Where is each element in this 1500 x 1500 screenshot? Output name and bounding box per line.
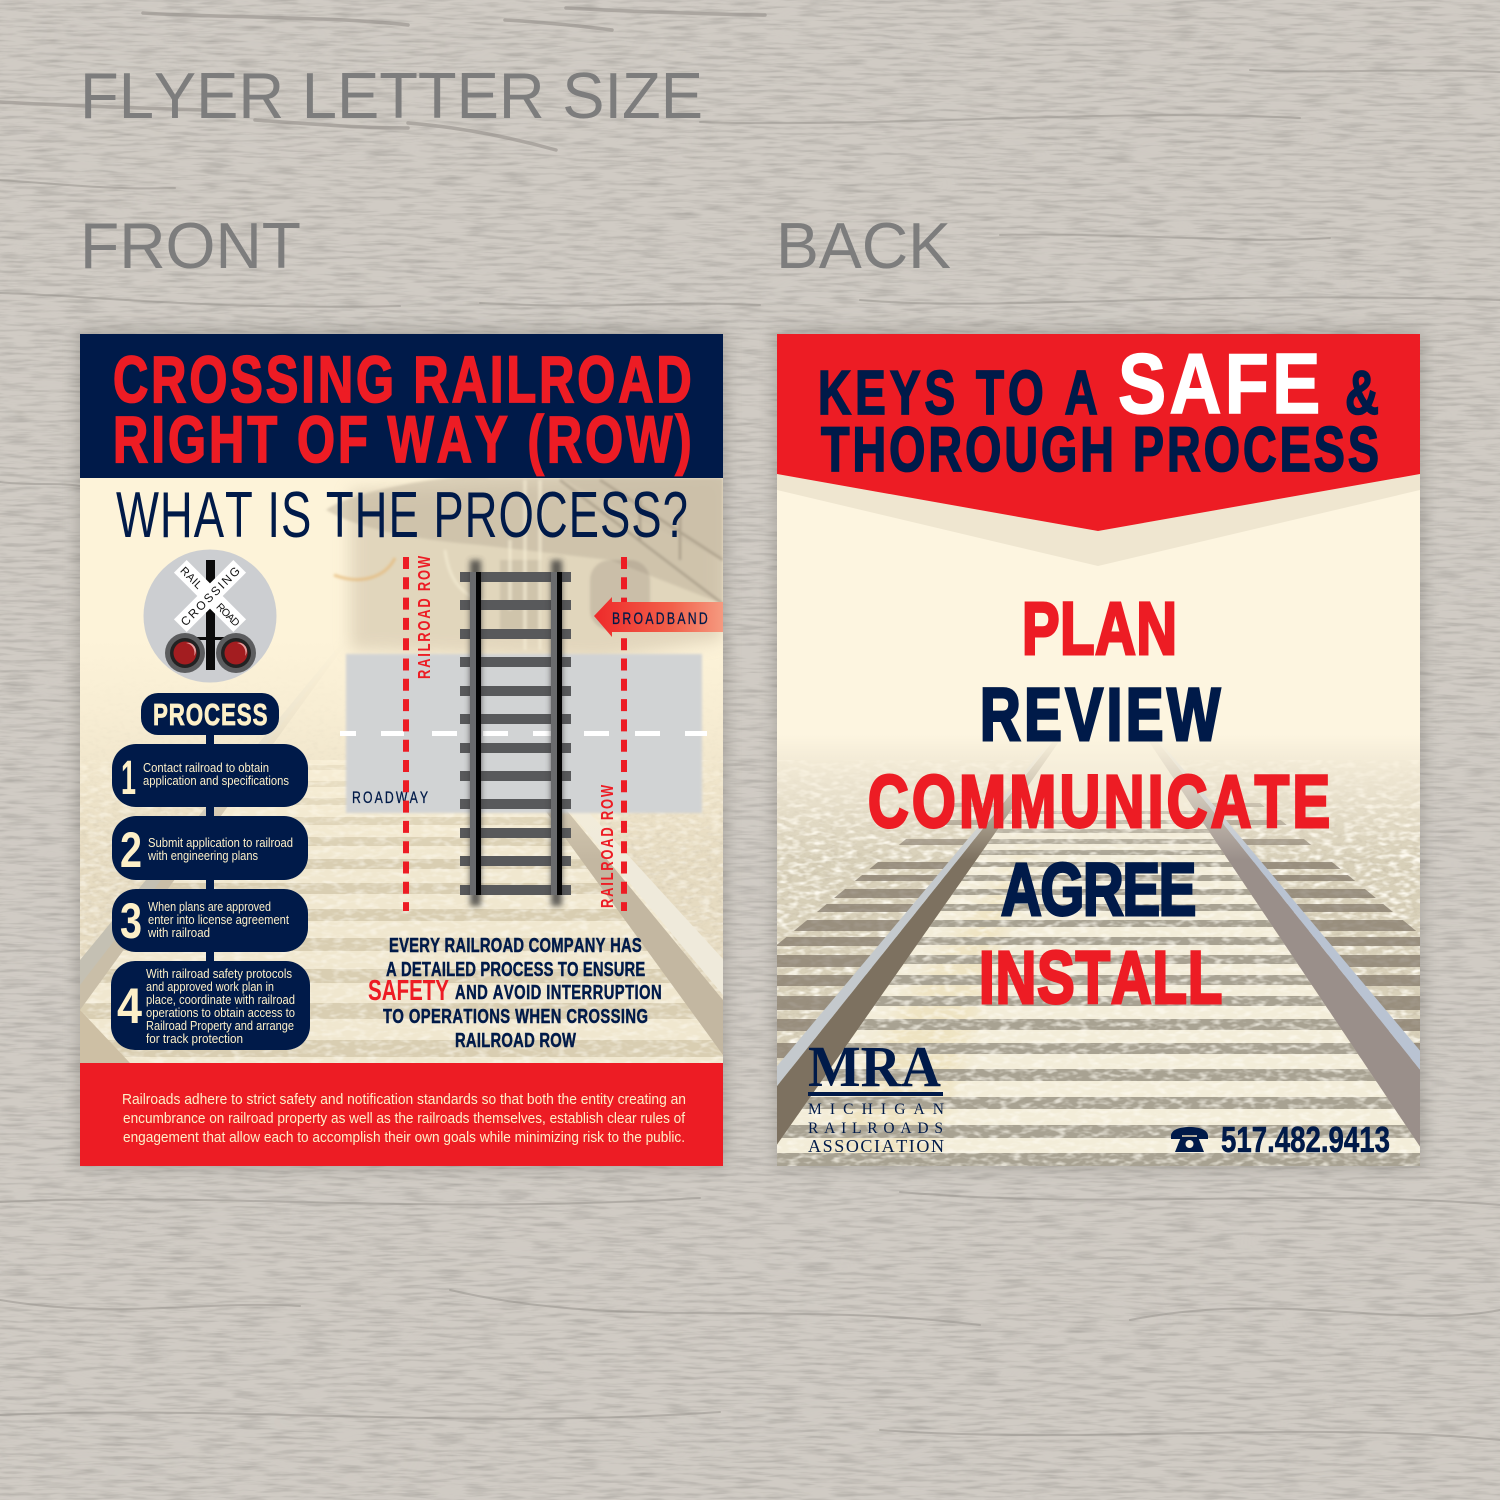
panel: front flyer	[80, 334, 723, 1166]
title banner: THOROUGH PROCESS	[821, 414, 1379, 485]
arrow: broadband: BROADBAND	[612, 610, 708, 629]
lower-left rail	[80, 724, 287, 1010]
icon: railroad crossing sign: CROSSING	[178, 564, 243, 629]
icon: railroad crossing sign: RAIL	[177, 565, 204, 592]
title banner: KEYS TO A	[818, 358, 1098, 428]
step 3: 3	[120, 893, 142, 949]
key words list: PLAN	[1022, 588, 1177, 670]
process label: PROCESS	[153, 697, 267, 732]
footer band: Railroads adhere to strict safety and notification standards so that both the entity creating an	[122, 1091, 686, 1108]
process connector line	[206, 730, 214, 965]
subtitle: WHAT IS THE PROCESS?	[116, 478, 688, 551]
key words list: COMMUNICATE	[868, 761, 1330, 843]
step 4: and approved work plan in	[146, 980, 274, 994]
step 4: operations to obtain access to	[146, 1006, 295, 1020]
diagram: railroad track	[460, 560, 571, 906]
step 2: 2	[120, 822, 142, 878]
title band: CROSSING RAILROAD	[113, 343, 692, 417]
icon: telephone	[1171, 1127, 1208, 1152]
panel: back flyer	[777, 334, 1420, 1166]
contact: phone	[1171, 1119, 1390, 1160]
step 4: 4	[117, 978, 142, 1034]
step 2: Submit application to railroad	[148, 836, 293, 850]
text block: safety note: EVERY RAILROAD COMPANY HAS	[389, 934, 642, 957]
step 2	[112, 816, 308, 880]
track bed	[777, 771, 1420, 1153]
ties outside rails	[777, 803, 1420, 1166]
background photo: tracks	[777, 474, 1420, 1166]
step 1	[112, 744, 308, 807]
step 4	[111, 961, 310, 1050]
logo: Michigan Railroads Association	[808, 1034, 944, 1156]
title banner: &	[1345, 358, 1379, 428]
logo: Michigan Railroads Association: ASSOCIATION	[808, 1136, 944, 1156]
text block: safety note: TO OPERATIONS WHEN CROSSING	[383, 1005, 648, 1028]
logo: Michigan Railroads Association: MICHIGAN	[808, 1101, 944, 1118]
step 1: application and specifications	[143, 774, 289, 788]
heading: front: FRONT	[80, 209, 301, 282]
text block: safety note	[368, 934, 662, 1052]
logo: Michigan Railroads Association: MRA	[808, 1034, 941, 1099]
title band	[80, 334, 723, 478]
key words list: AGREE	[1001, 849, 1196, 931]
title band: RIGHT OF WAY (ROW)	[113, 403, 692, 477]
footer band: engagement that allow each to accomplish their own goals while minimizing risk to the public.	[123, 1129, 685, 1146]
chevron shadow band	[777, 474, 1420, 566]
footer band: encumbrance on railroad property as well as the railroads themselves, establish clear rules of	[123, 1110, 686, 1127]
lower-right rail	[546, 812, 723, 1055]
step 4: With railroad safety protocols	[146, 967, 292, 981]
diagram: railroad row boundaries: RAILROAD ROW	[598, 785, 618, 908]
right rail	[1160, 758, 1420, 1146]
diagram: railroad row boundaries: RAILROAD ROW	[415, 556, 435, 679]
step 3	[112, 889, 308, 952]
step 3: with railroad	[147, 926, 210, 940]
step 4: Railroad Property and arrange	[146, 1019, 294, 1033]
left rail	[777, 750, 1052, 1144]
page heading: flyer letter size: FLYER LETTER SIZE	[80, 59, 703, 132]
step 4: for track protection	[146, 1032, 243, 1046]
flyer shadows	[78, 330, 1423, 1168]
step 3: When plans are approved	[148, 900, 271, 914]
diagram: roadway: ROADWAY	[352, 789, 428, 808]
step 3: enter into license agreement	[148, 913, 289, 927]
contact: phone: 517.482.9413	[1221, 1119, 1390, 1160]
text block: safety note: A DETAILED PROCESS TO ENSURE	[386, 958, 645, 981]
key words list: INSTALL	[979, 937, 1222, 1019]
logo: Michigan Railroads Association: RAILROADS	[808, 1120, 943, 1137]
text block: safety note: SAFETY	[368, 975, 449, 1007]
text block: safety note: AND AVOID INTERRUPTION	[455, 981, 662, 1004]
step 2: with engineering plans	[147, 849, 258, 863]
title banner	[777, 334, 1420, 531]
diagram: roadway	[340, 654, 707, 813]
step 1: Contact railroad to obtain	[143, 761, 269, 775]
icon: railroad crossing sign	[144, 550, 276, 682]
step 4: place, coordinate with railroad	[146, 993, 295, 1007]
ghost locomotive	[326, 476, 723, 660]
diagram: railroad row boundaries	[406, 556, 624, 911]
title banner: SAFE	[1118, 336, 1320, 431]
arrow: broadband	[594, 597, 723, 637]
key words list: REVIEW	[980, 674, 1220, 756]
text block: safety note: RAILROAD ROW	[455, 1029, 576, 1052]
heading: back: BACK	[776, 209, 951, 282]
footer band	[80, 1063, 723, 1166]
icon: railroad crossing sign: ROAD	[214, 601, 242, 630]
background photo: train and tracks	[80, 476, 723, 1063]
step 1: 1	[121, 752, 136, 805]
key words list	[868, 588, 1330, 1019]
process label	[141, 693, 279, 735]
